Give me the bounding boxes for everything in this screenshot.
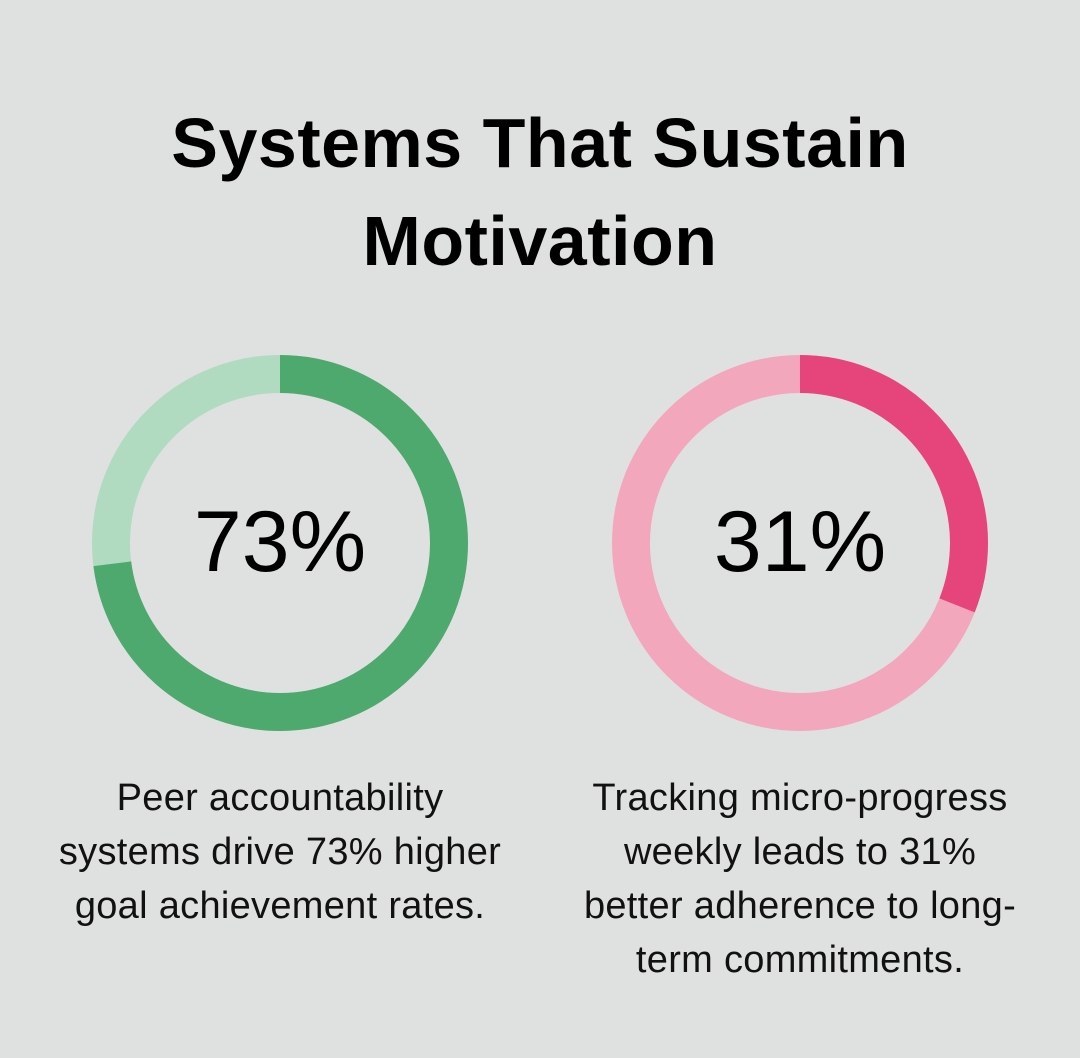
title: Motivation [363, 202, 717, 280]
donut: 31%: 31% [714, 494, 886, 590]
caption left [59, 777, 501, 927]
caption left: goal achievement rates. [75, 885, 485, 927]
donut: 73%: 73% [194, 494, 366, 590]
caption right: Tracking micro-progress [592, 777, 1008, 819]
title: Systems That Sustain [171, 104, 909, 182]
donut: 73% [111, 374, 449, 712]
donut: 31% [631, 374, 969, 712]
caption right: weekly leads to 31% [624, 831, 976, 873]
caption left: Peer accountability [117, 777, 443, 819]
title [171, 104, 909, 280]
caption right: term commitments. [636, 939, 964, 981]
caption right: better adherence to long- [584, 885, 1016, 927]
caption left: systems drive 73% higher [59, 831, 501, 873]
caption right [584, 777, 1016, 981]
